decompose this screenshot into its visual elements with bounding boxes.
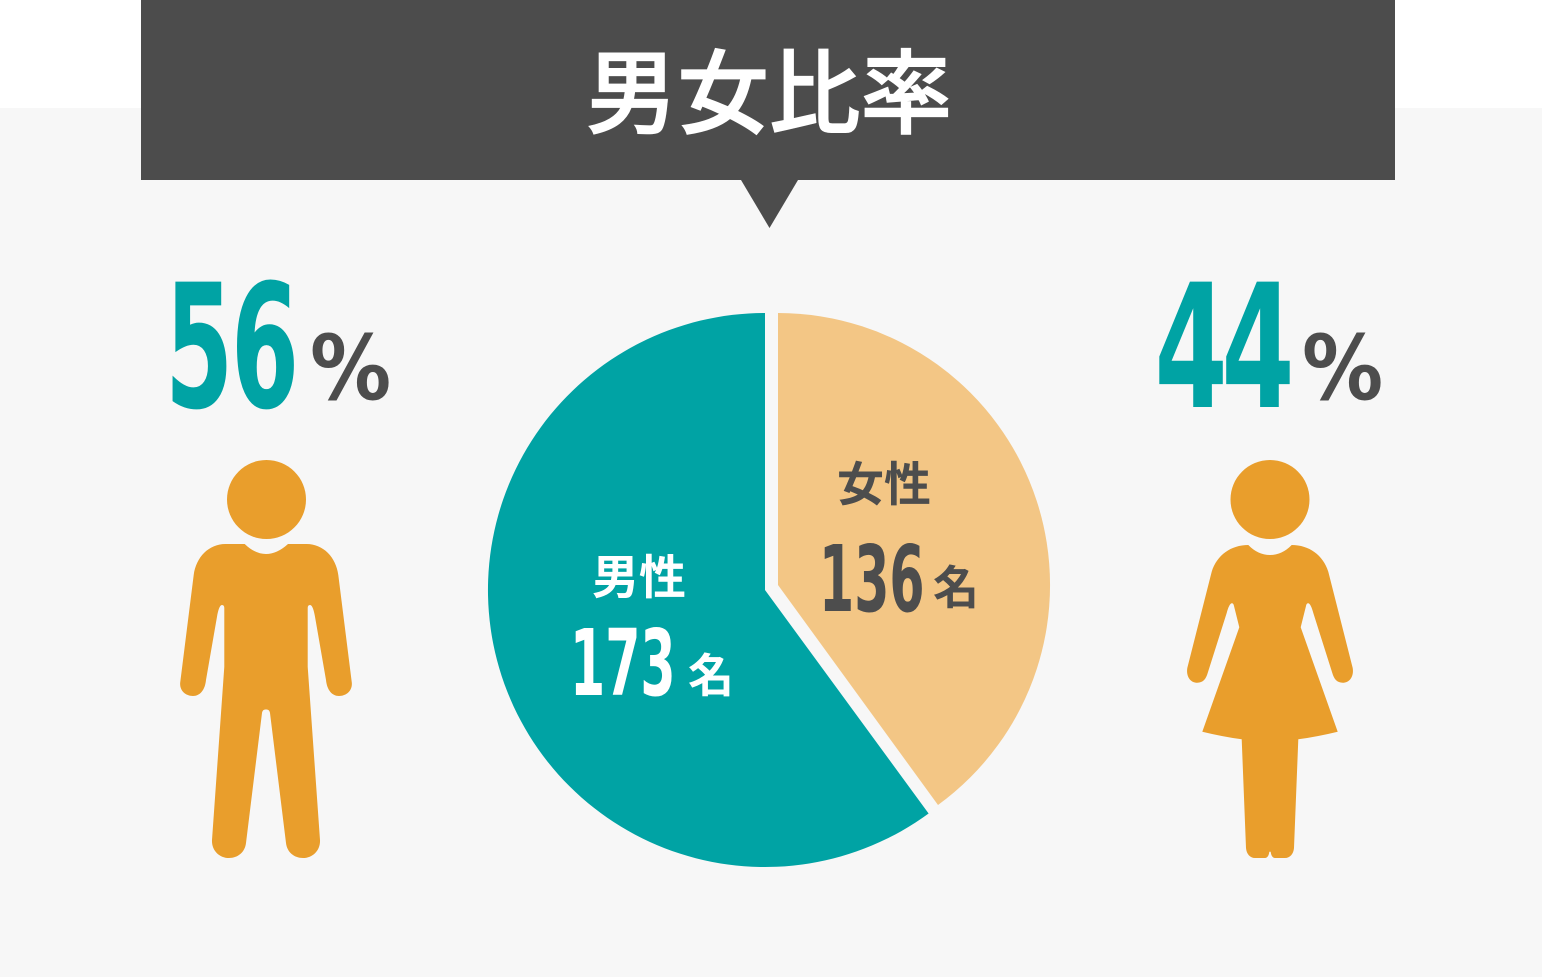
icon: female figure (1187, 460, 1353, 858)
percentage: male (165, 249, 391, 449)
title: 男女比率 (586, 44, 952, 146)
title banner (141, 0, 1395, 228)
pie slice: male (488, 313, 929, 867)
count: male: 173 (570, 609, 676, 717)
percentage: female: % (1302, 317, 1383, 421)
label: female: 女性 (837, 458, 931, 511)
icon: male figure (180, 460, 352, 858)
percentage: male: 56 (165, 249, 297, 449)
pie chart (488, 313, 1050, 867)
pie slice: female (778, 313, 1050, 805)
label: male: 男性 (592, 551, 686, 604)
count: female: 136 (819, 525, 925, 633)
count: male: 名 (688, 650, 734, 702)
percentage: female (1155, 248, 1383, 448)
percentage: male: % (310, 317, 391, 421)
percentage: female: 44 (1155, 248, 1290, 448)
count: female: 名 (933, 562, 979, 614)
count: female (819, 525, 979, 633)
count: male (570, 609, 734, 717)
